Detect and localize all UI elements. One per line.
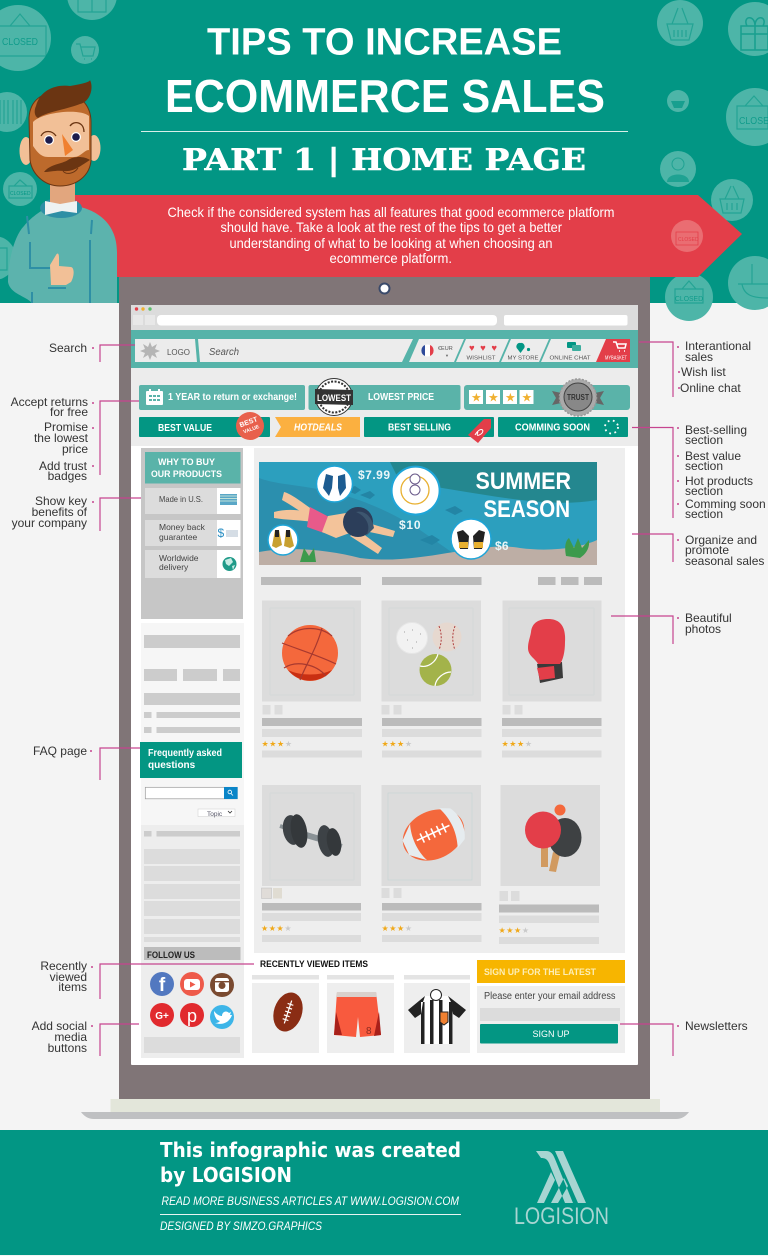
icon: google plus: G+ [155,1011,169,1022]
product: boxing glove: ★★★★ [502,740,533,748]
promo band [131,368,638,446]
seasonal banner: SEASON [484,496,570,523]
summer season heading: SUMMER [476,468,571,495]
newsletter heading [477,960,625,983]
icon: basket circle top right [657,0,703,46]
callout: seasonal sales: seasonal sales [685,554,764,568]
footer credit heading: by LOGISION [160,1163,292,1187]
product circle: fins [316,466,352,502]
icon: closed sign on banner [671,220,703,252]
header band [0,0,768,321]
icon: basketball [282,625,338,681]
icon: small closed sign circle: CLOSED [10,191,31,197]
newsletter panel [477,960,625,1053]
icon: closed sign circle: CLOSED [2,36,38,48]
logo box: LOGO [167,347,190,357]
icon: twitter [210,1005,234,1029]
callout: returns, lowest price, trust badges: the lowest [34,431,89,445]
search box: Search [209,347,239,358]
tab: coming soon: COMMING SOON [515,422,590,434]
rating stars: ★ [471,390,482,404]
logo: LOGISION [514,1203,609,1230]
red arrow banner [72,195,742,277]
icon: youtube [180,972,204,996]
currency selector: €EUR [438,346,453,352]
icon: gift circle right [728,2,768,56]
callout: section tabs: section [685,459,723,473]
icon: dumbbell [280,813,343,858]
title line one: TIPS TO INCREASE [207,22,562,64]
product: boxing glove [502,600,602,758]
badge: lowest [315,378,353,416]
icon: calendar [146,389,163,405]
banner text: understanding of what to be looking at when choosing an [230,235,552,251]
callout: international, wish list, chat: sales [685,350,713,364]
badge: best value [236,412,264,440]
newsletter panel: Please enter your email address [484,991,616,1002]
tab: best value [139,412,270,440]
icon: left edge circle [0,236,16,280]
banner text [168,204,614,266]
seasonal banner: $10 [399,518,421,532]
icon: closed sign bottom right [665,273,713,321]
callout: returns, lowest price, trust badges: Add trust [39,459,88,473]
online chat [541,339,608,362]
benefit: money back: Money back [159,522,206,532]
footer credit heading: This infographic was created [160,1138,461,1162]
sidebar: why to buy [141,448,243,619]
newsletter heading: SIGN UP FOR THE LATEST [484,967,596,977]
callout: section tabs: Hot products [685,474,753,488]
callout: returns, lowest price, trust badges: badges [48,469,87,483]
logo box [135,339,197,362]
wishlist: ♥♥♥ [469,343,497,354]
callout: beautiful photos: photos [685,622,721,636]
callout: social [32,1019,139,1056]
icon: american football [394,800,473,870]
footer read more: READ MORE BUSINESS ARTICLES AT WWW.LOGISION.COM [162,1194,459,1208]
callout: section tabs: section [685,507,723,521]
callout: returns, lowest price, trust badges: price [62,442,88,456]
callout: beautiful photos: Beautiful [685,611,732,625]
icon: pinterest: p [187,1006,197,1026]
benefit: worldwide delivery [145,550,240,578]
callout: key benefits: your company [12,516,87,530]
item: referee shirt [404,983,470,1053]
FAQ banner: Frequently asked [148,748,222,759]
character: bearded man with thumb up [8,80,117,303]
social media buttons [150,972,234,1029]
benefit: money back: $ [218,526,224,540]
callout: search [49,341,135,362]
rating stars [469,390,534,404]
FAQ banner: questions [148,760,196,771]
callouts left [11,341,254,1056]
callout: recently viewed: items [58,980,87,994]
callout: section tabs: section [685,484,723,498]
recently viewed heading: RECENTLY VIEWED ITEMS [260,959,368,970]
callout: FAQ: FAQ page [33,744,87,758]
callout: newsletters [620,1019,748,1056]
callout: international, wish list, chat: Online chat [680,381,741,395]
wishlist: WISHLIST [466,356,496,362]
callout: section tabs: Comming soon [685,497,766,511]
tablet frame [119,277,650,1099]
why to buy heading: WHY TO BUY [158,457,215,467]
browser window [131,305,638,1065]
topic dropdown [198,809,235,818]
FAQ search box [145,787,238,799]
callouts right [611,339,766,1056]
browser chrome [131,305,638,330]
logo [514,1151,609,1230]
callout: key benefits: Show key [35,494,87,508]
banner text: should have. Take a look at the rest of the tips to get a better [220,219,562,235]
sign up button [480,1024,618,1044]
callout: beautiful photos [611,611,732,644]
callout: international, wish list, chat: Wish list [681,365,726,379]
icon: instagram [210,973,234,997]
my store [501,339,549,362]
tab: coming soon [498,417,628,437]
badge: trust: TRUST [567,393,589,402]
product: table tennis: ★★★★ [498,926,530,935]
callout: social: media [54,1030,87,1044]
product: basketball [262,600,362,758]
icon: closed sign circle [0,5,51,71]
product: american football [382,785,482,942]
callout: FAQ [33,744,140,780]
icon: closed sign bottom right: CLOSED [675,296,703,303]
footer credit heading [160,1138,461,1187]
sign up button: SIGN UP [532,1029,570,1039]
badge: best value: BEST [239,416,259,429]
tab: best value: BEST VALUE [158,423,212,434]
icon: loading spinner [605,420,618,434]
recently viewed items [252,975,470,1053]
icon: closed sign on banner: CLOSED [678,237,699,243]
why to buy heading: OUR PRODUCTS [151,469,222,479]
wishlist [456,339,509,362]
callout: search: Search [49,341,87,355]
search box [198,339,413,362]
callout: recently viewed: Recently [40,959,87,973]
basket: MYBASKET [605,356,627,362]
icon: barcode circle [0,92,27,132]
item: shorts [327,983,394,1053]
rating stars: ★ [505,390,516,404]
promo: returns [139,385,305,410]
FAQ banner [140,742,242,778]
currency selector: ▼ [445,353,449,358]
callout: recently viewed: viewed [50,970,87,984]
callout: section tabs: Best-selling [685,423,747,437]
main content panel [254,448,625,953]
banner text: ecommerce platform. [330,250,452,266]
sidebar: placeholder filters and FAQ [141,623,244,825]
footer [0,1130,768,1255]
product: dumbbell [261,785,361,942]
callout: recently viewed [40,959,254,999]
product: assorted balls: ★★★★ [382,740,413,748]
icon: basin circle [728,256,768,310]
tab: best selling: BEST SELLING [388,422,451,434]
product circle: gloves [451,519,491,559]
basket [596,339,630,362]
callout: social: Add social [32,1019,87,1033]
tab: hot deals [275,417,360,437]
badge: best value: VALUE [243,424,261,435]
callout: key benefits [12,494,141,531]
icon: price tag [468,419,491,443]
callout: seasonal sales: promote [685,543,729,557]
promo: lowest price: LOWEST PRICE [368,392,434,403]
icon: cart circle [71,36,99,64]
callout: seasonal sales [632,533,764,568]
follow us heading [144,947,240,961]
callout: returns, lowest price, trust badges [11,395,139,483]
benefit: made in US [145,488,240,514]
icon: balls [396,622,462,686]
callout: international, wish list, chat: Interantional [685,339,751,353]
seaweed [300,538,589,562]
callout: key benefits: benefits of [32,505,88,519]
icon: boxing glove [528,619,565,683]
benefit: money back: guarantee [159,532,198,542]
rating stars: ★ [488,390,499,404]
topic dropdown: Topic [207,811,223,818]
callout: international, wish list, chat [639,339,751,397]
product: table tennis [498,785,600,944]
callout: section tabs: section [685,433,723,447]
icon: table tennis paddles [525,804,582,872]
title divider [141,131,628,132]
why to buy heading [145,452,240,484]
benefit: worldwide delivery: Worldwide [159,553,199,563]
callout: seasonal sales: Organize and [685,533,757,547]
follow us heading: FOLLOW US [147,950,195,961]
title line two: ECOMMERCE SALES [165,70,605,122]
product circle: flippers [268,525,298,555]
seasonal banner [259,462,597,565]
online chat: ONLINE CHAT [550,356,591,362]
item: football [252,983,319,1053]
my store: MY STORE [508,356,539,362]
prices: $7.99 [358,468,390,482]
tablet base [81,1099,689,1119]
promo: lowest price [308,378,460,416]
callout: section tabs [632,423,766,521]
tab: best selling [364,417,494,443]
top navigation bar [131,330,638,368]
subtitle: PART 1 | HOME PAGE [182,143,586,178]
rating stars: ★ [522,390,532,404]
product: assorted balls [382,600,482,758]
callout: returns, lowest price, trust badges: Promise [44,420,88,434]
callout: section tabs: Best value [685,449,741,463]
diver [274,492,395,554]
callout: returns, lowest price, trust badges: Accept returns [11,395,88,409]
icon: facebook: f [159,975,166,996]
filter bars [261,577,602,585]
benefit: worldwide delivery: delivery [159,562,189,572]
product circle: air gauge [392,467,440,515]
product: basketball: ★★★★ [262,740,293,748]
banner fish [330,486,463,545]
icon: gift circle top left [67,0,117,20]
tab: hot deals: HOTDEALS [294,422,342,434]
callout: returns, lowest price, trust badges: for free [50,405,88,419]
badge: trust [552,379,604,416]
callout: social: buttons [48,1041,87,1055]
camera [380,284,390,294]
product: dumbbell: ★★★★ [261,924,292,933]
item: shorts: 8 [366,1026,372,1037]
banner text: Check if the considered system has all features that good ecommerce platform [168,204,614,220]
promo: returns: 1 YEAR to return or exchange! [168,392,297,403]
icon: basket circle lower right [711,179,753,221]
sidebar bottom bar [144,1037,240,1053]
promo: trust badges [464,379,630,416]
icon: small closed sign circle [3,172,37,206]
badge: lowest: LOWEST [317,393,351,403]
product: american football: ★★★★ [382,924,413,933]
icon: woman circle [660,151,696,187]
benefit: money back [145,520,240,546]
seasonal banner: $6 [495,539,509,553]
callout: newsletters: Newsletters [685,1019,748,1033]
icon: closed sign circle right [726,88,768,146]
benefit: made in US: Made in U.S. [159,494,203,504]
sidebar: placeholder list [141,825,244,1058]
currency selector [409,339,464,362]
icon: small basket circle [667,90,689,112]
footer designer: DESIGNED BY SIMZO.GRAPHICS [160,1219,322,1233]
